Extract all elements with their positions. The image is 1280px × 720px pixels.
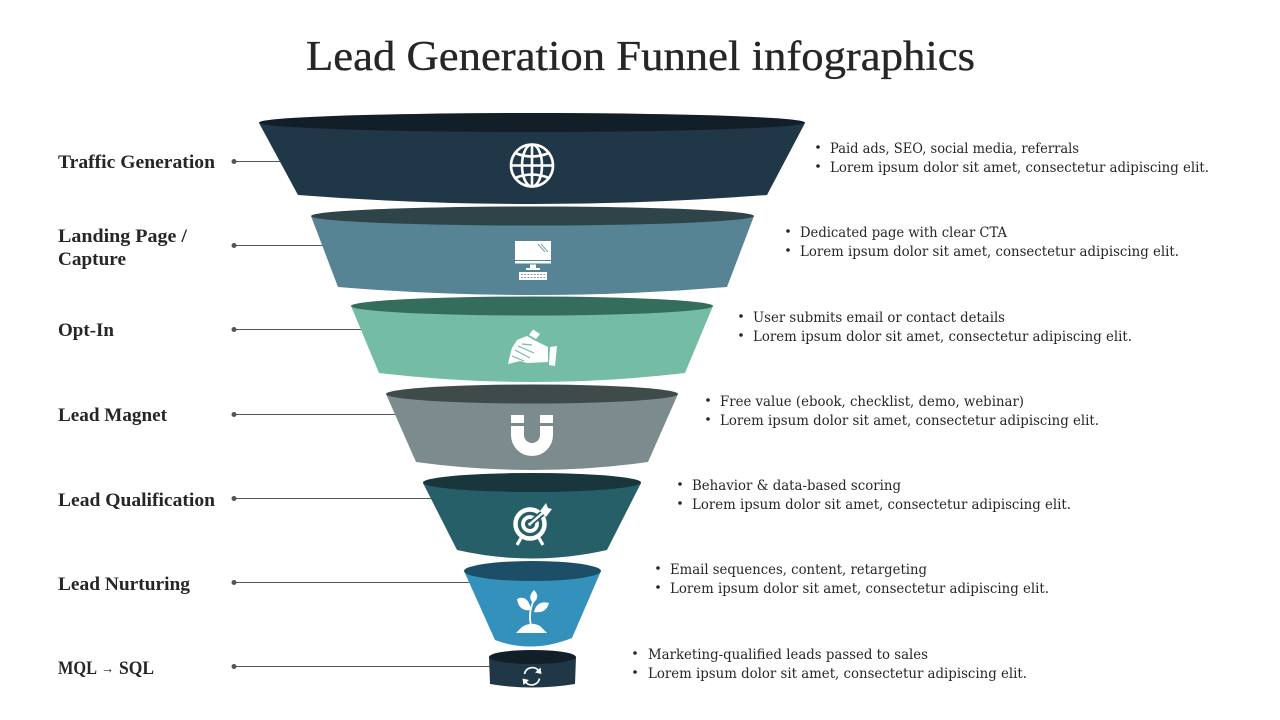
funnel segment xyxy=(464,561,601,647)
description: Lorem ipsum dolor sit amet, consectetur adipiscing elit. xyxy=(648,666,1027,682)
description: Marketing-qualified leads passed to sales xyxy=(648,647,928,663)
description: Paid ads, SEO, social media, referrals xyxy=(830,141,1079,157)
stage label: Lead Magnet xyxy=(58,405,168,426)
stage 3: Opt-In xyxy=(58,296,1132,382)
icon: computer xyxy=(515,241,551,280)
stage label: Capture xyxy=(58,249,126,270)
description: Free value (ebook, checklist, demo, webinar) xyxy=(720,394,1024,410)
stage label: MQL xyxy=(58,658,97,679)
stage label xyxy=(58,226,188,270)
stage label: → xyxy=(101,662,114,677)
description: Behavior & data-based scoring xyxy=(692,478,901,494)
stage label: Landing Page / xyxy=(58,226,188,247)
funnel segment xyxy=(423,473,641,558)
description: Lorem ipsum dolor sit amet, consectetur adipiscing elit. xyxy=(720,413,1099,429)
funnel segment xyxy=(259,113,805,204)
leader line xyxy=(232,159,282,164)
description: Email sequences, content, retargeting xyxy=(670,562,927,578)
stage label: Lead Nurturing xyxy=(58,574,190,595)
stage 7: MQL to SQL xyxy=(58,647,1027,688)
stage label: Lead Qualification xyxy=(58,490,215,511)
stage 5: Lead Qualification xyxy=(58,473,1071,558)
description xyxy=(816,141,1209,176)
description xyxy=(786,225,1179,260)
icon: magnet xyxy=(511,415,553,450)
icon: target with arrow xyxy=(516,503,552,545)
funnel segment xyxy=(386,384,678,470)
stage 6: Lead Nurturing xyxy=(58,561,1049,647)
leader line xyxy=(232,327,362,332)
description: Lorem ipsum dolor sit amet, consectetur adipiscing elit. xyxy=(800,244,1179,260)
funnel segment xyxy=(351,296,713,382)
leader line xyxy=(232,243,324,248)
description: Lorem ipsum dolor sit amet, consectetur adipiscing elit. xyxy=(670,581,1049,597)
stage label xyxy=(58,658,154,679)
leader line xyxy=(232,412,396,417)
stage 1: Traffic Generation xyxy=(58,113,1209,204)
funnel segment xyxy=(311,206,754,295)
description xyxy=(678,478,1071,513)
stage 4: Lead Magnet xyxy=(58,384,1099,470)
icon: globe xyxy=(511,144,553,186)
icon: writing hand xyxy=(508,330,557,366)
description xyxy=(706,394,1099,429)
description xyxy=(739,310,1132,345)
leader line xyxy=(232,496,432,501)
leader line xyxy=(232,664,490,669)
icon: plant xyxy=(516,590,549,633)
title: Lead Generation Funnel infographics xyxy=(306,34,975,80)
description: Lorem ipsum dolor sit amet, consectetur adipiscing elit. xyxy=(692,497,1071,513)
description xyxy=(633,647,1027,682)
stage 2: Landing Page / Capture xyxy=(58,206,1179,295)
description: Dedicated page with clear CTA xyxy=(800,225,1007,241)
description: User submits email or contact details xyxy=(753,310,1005,326)
description xyxy=(656,562,1049,597)
stage label: Traffic Generation xyxy=(58,152,215,173)
funnel segment xyxy=(489,650,576,688)
stage label: Opt-In xyxy=(58,320,114,341)
stage label: SQL xyxy=(119,658,154,679)
icon: refresh arrows xyxy=(522,668,542,685)
description: Lorem ipsum dolor sit amet, consectetur adipiscing elit. xyxy=(753,329,1132,345)
description: Lorem ipsum dolor sit amet, consectetur adipiscing elit. xyxy=(830,160,1209,176)
leader line xyxy=(232,580,470,585)
